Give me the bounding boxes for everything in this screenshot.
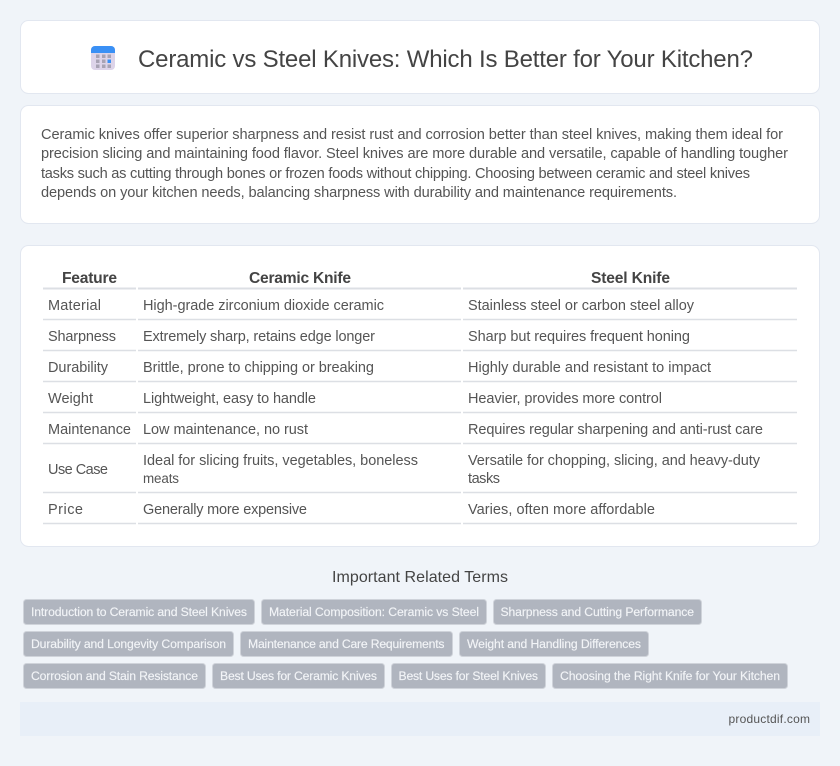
row: use case: tasks [468,471,500,487]
tag [392,664,546,688]
tag: Weight and Handling Differences [467,637,641,651]
row: durability: Durability [48,360,109,376]
tag [240,632,452,656]
row: material: Material [48,298,101,314]
row: maintenance [43,422,797,444]
panel: comparison table [20,246,820,546]
intro paragraph: tasks such as cutting through bones or frozen foods without chipping. Choosing between ceramic and steel knives [41,166,750,182]
intro paragraph: depends on your kitchen needs, balancing sharpness with durability and maintenance requirements. [41,185,677,201]
tag [552,664,788,688]
row: sharpness: Extremely sharp, retains edge longer [143,329,375,345]
row: price: Generally more expensive [143,502,307,518]
footer source text: productdif.com [728,712,810,726]
row: use case: Ideal for slicing fruits, vegetables, boneless [143,453,418,469]
row: maintenance: Low maintenance, no rust [143,422,308,438]
heading: important related terms: Important Related Terms [332,569,508,586]
intro paragraph [41,127,788,201]
row: use case: Versatile for chopping, slicing, and heavy-duty [468,453,761,469]
tag: Introduction to Ceramic and Steel Knives [31,605,247,619]
panel: header [20,20,820,94]
row: maintenance: Requires regular sharpening and anti-rust care [468,422,763,438]
row: weight: Lightweight, easy to handle [143,391,316,407]
tag: Best Uses for Ceramic Knives [220,669,377,683]
row: durability: Brittle, prone to chipping or breaking [143,360,374,376]
row: material: Stainless steel or carbon steel alloy [468,298,695,314]
tag: Maintenance and Care Requirements [248,637,444,651]
row: weight [43,391,797,412]
row: sharpness [43,329,797,350]
row: durability: Highly durable and resistant to impact [468,360,711,376]
row: material: High-grade zirconium dioxide ceramic [143,298,384,314]
row: price: Varies, often more affordable [468,502,655,518]
row: sharpness: Sharp but requires frequent honing [468,329,690,345]
table header row: Steel Knife [591,270,670,287]
tag: Material Composition: Ceramic vs Steel [269,605,479,619]
tag: Best Uses for Steel Knives [398,669,538,683]
intro paragraph: Ceramic knives offer superior sharpness and resist rust and corrosion better than steel knives, making them ideal for [41,127,783,143]
tag [494,600,702,624]
row: weight: Heavier, provides more control [468,391,662,407]
tag: Choosing the Right Knife for Your Kitchen [560,669,780,683]
row: maintenance: Maintenance [48,422,131,438]
row: use case: Use Case [48,462,108,478]
row: use case [43,453,797,492]
tag [24,632,234,656]
footer [20,702,820,736]
table header row: Ceramic Knife [249,270,351,287]
row: material [43,298,797,320]
intro paragraph: precision slicing and maintaining food flavor. Steel knives are more durable and versatile, capable of handling tougher [41,146,788,162]
row: durability [43,360,797,382]
table header row: Feature [62,270,117,287]
tag [24,664,206,688]
panel: introduction [20,106,820,224]
row: price: Price [48,502,83,518]
row: weight: Weight [48,391,93,407]
tag [24,600,254,624]
title: Ceramic vs Steel Knives: Which Is Better for Your Kitchen? [138,46,753,73]
tag: Durability and Longevity Comparison [31,637,226,651]
row: use case: meats [143,471,179,486]
row: sharpness: Sharpness [48,329,116,345]
icon: calendar [91,46,115,70]
tag [460,632,648,656]
tag: Sharpness and Cutting Performance [500,605,694,619]
table header row [43,270,797,288]
tag [212,664,384,688]
tag [262,600,486,624]
tag group: related terms [24,600,788,688]
tag: Corrosion and Stain Resistance [31,669,198,683]
row: price [43,502,797,524]
